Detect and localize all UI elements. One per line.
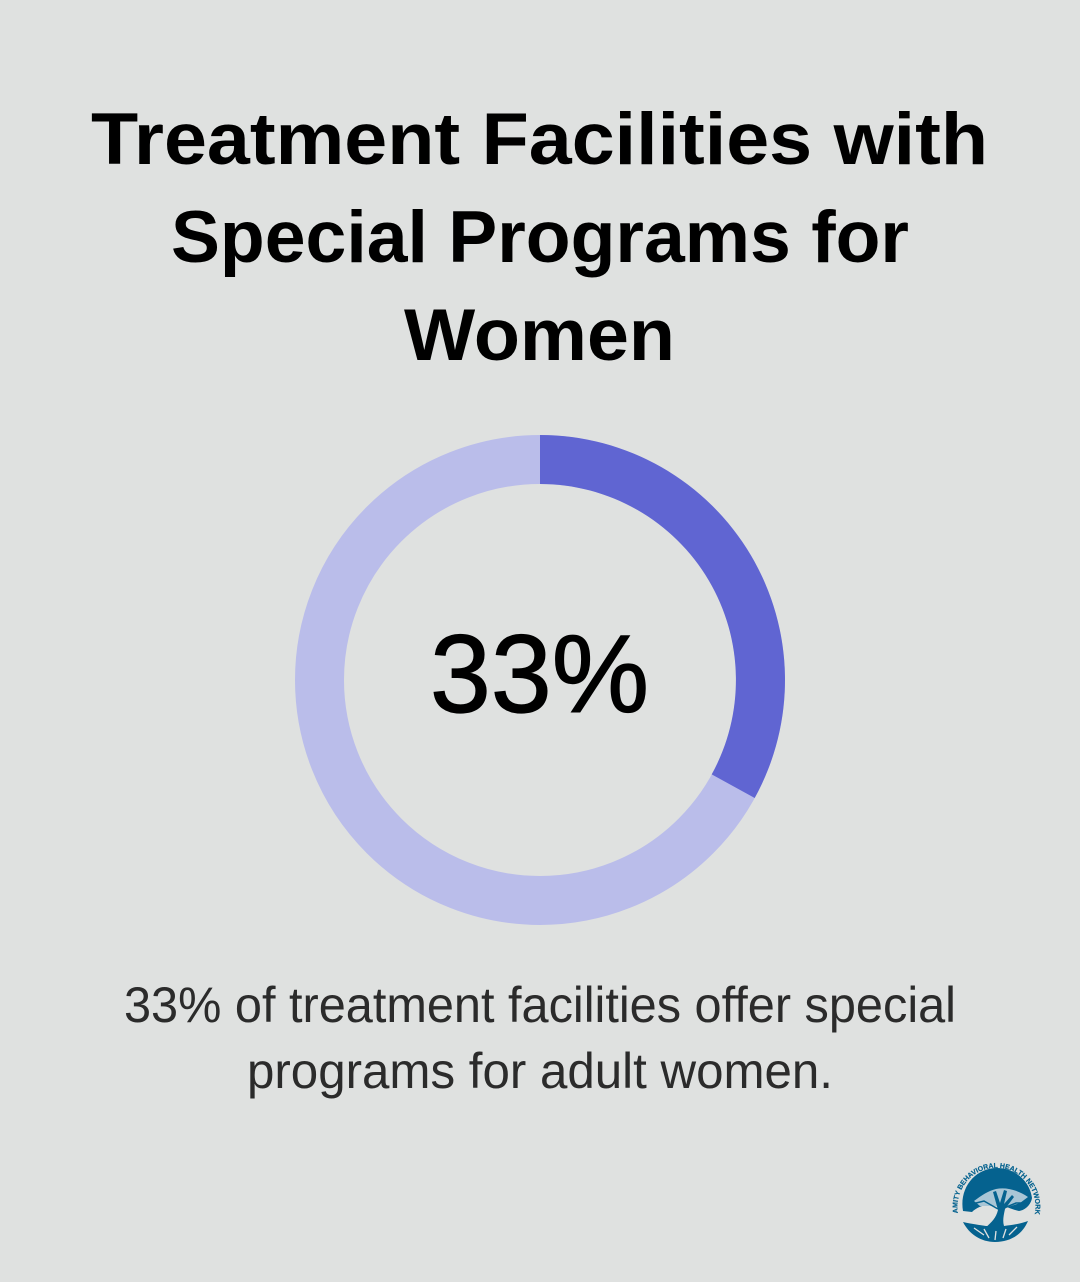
title: Treatment Facilities with [91, 99, 988, 180]
title: Women [404, 295, 675, 376]
donut chart: 33% [320, 435, 785, 900]
logo ring text: AMITY BEHAVIORAL HEALTH NETWORK [952, 1162, 1040, 1215]
logo canopy light gaps [974, 1188, 1028, 1207]
description text [124, 977, 956, 1099]
icon: Amity Behavioral Health Network logo [952, 1162, 1040, 1242]
description text: programs for adult women. [247, 1043, 833, 1099]
description text: 33% of treatment facilities offer special [124, 977, 956, 1033]
logo roots bowl [963, 1221, 1028, 1242]
donut track [320, 460, 760, 900]
logo tree canopy [962, 1168, 1032, 1212]
logo tree trunk and branches [984, 1190, 1014, 1230]
title [91, 99, 988, 376]
donut highlighted segment [540, 435, 785, 798]
donut center value: 33% [430, 613, 649, 736]
title: Special Programs for [171, 197, 909, 278]
